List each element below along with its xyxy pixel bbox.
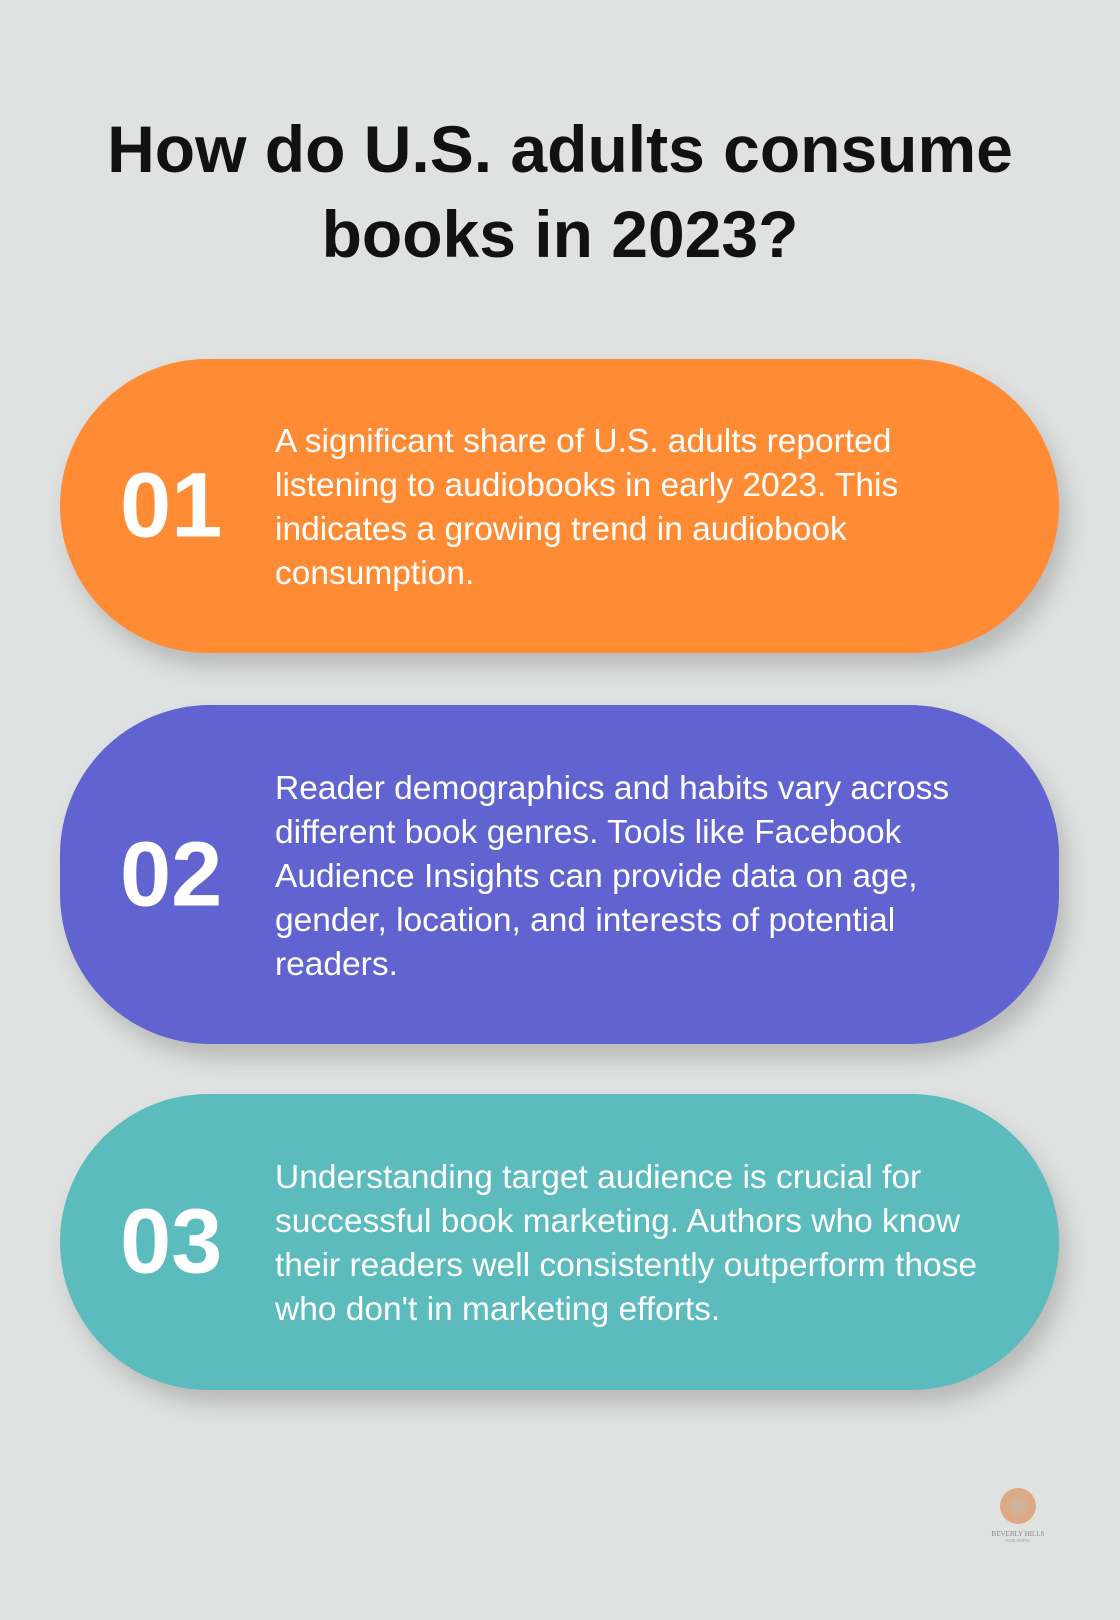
- logo: PUBLISHING: [1006, 1538, 1030, 1543]
- panel: 03: [60, 1094, 1059, 1390]
- text 02: gender, location, and interests of potential: [275, 902, 895, 938]
- text 01: listening to audiobooks in early 2023. This: [275, 467, 898, 504]
- text 02: readers.: [275, 946, 398, 982]
- text 01: A significant share of U.S. adults reported: [275, 423, 891, 460]
- logo: [992, 1488, 1044, 1543]
- panel: 01: [60, 359, 1059, 653]
- text 02: Audience Insights can provide data on age,: [275, 858, 918, 894]
- number 02: 02: [120, 823, 222, 925]
- text 03: Understanding target audience is crucial for: [275, 1159, 921, 1196]
- text 02: Reader demographics and habits vary across: [275, 770, 949, 806]
- number 01: 01: [120, 454, 222, 556]
- number 03: 03: [120, 1190, 222, 1292]
- text 03: [275, 1159, 977, 1328]
- logo: BEVERLY HILLS: [992, 1530, 1044, 1538]
- text 02: [275, 770, 949, 982]
- text 03: successful book marketing. Authors who know: [275, 1203, 960, 1240]
- text 03: their readers well consistently outperform those: [275, 1247, 977, 1284]
- text 01: indicates a growing trend in audiobook: [275, 511, 847, 548]
- title: books in 2023?: [322, 197, 798, 271]
- text 03: who don't in marketing efforts.: [275, 1291, 720, 1328]
- text 01: [275, 423, 898, 592]
- title: How do U.S. adults consume: [107, 112, 1013, 186]
- panel: 02: [60, 705, 1059, 1044]
- title: [107, 112, 1013, 271]
- text 02: different book genres. Tools like Facebook: [275, 814, 901, 850]
- text 01: consumption.: [275, 555, 474, 592]
